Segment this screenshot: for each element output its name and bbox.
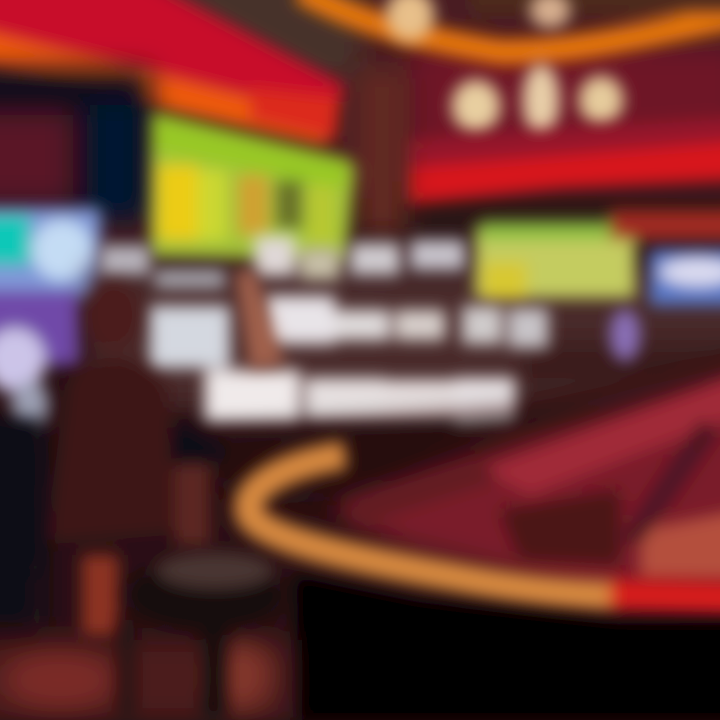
brown column [358,70,406,235]
ceiling background [0,0,720,240]
stool [120,552,283,720]
yellow green sign left [150,112,355,262]
yellow green sign right [475,210,720,300]
mid dark zone [90,270,720,410]
black table base [295,575,720,720]
chandelier lights [386,0,623,136]
lower dark floor [0,360,720,630]
red ceiling band right [405,115,720,204]
table surface red [330,365,720,600]
blue white screen right [610,250,720,361]
ceiling red band left [0,0,345,145]
dark left wall [0,70,150,220]
pink pole behind figure [235,270,285,370]
ceiling orange arc [300,0,720,52]
cyan blue screen left [0,208,100,430]
table felt stripes [340,375,720,580]
bottom left floor [0,640,290,720]
white rows of slot screens [100,236,548,432]
seated figure [0,281,225,635]
table orange rim [248,455,720,598]
